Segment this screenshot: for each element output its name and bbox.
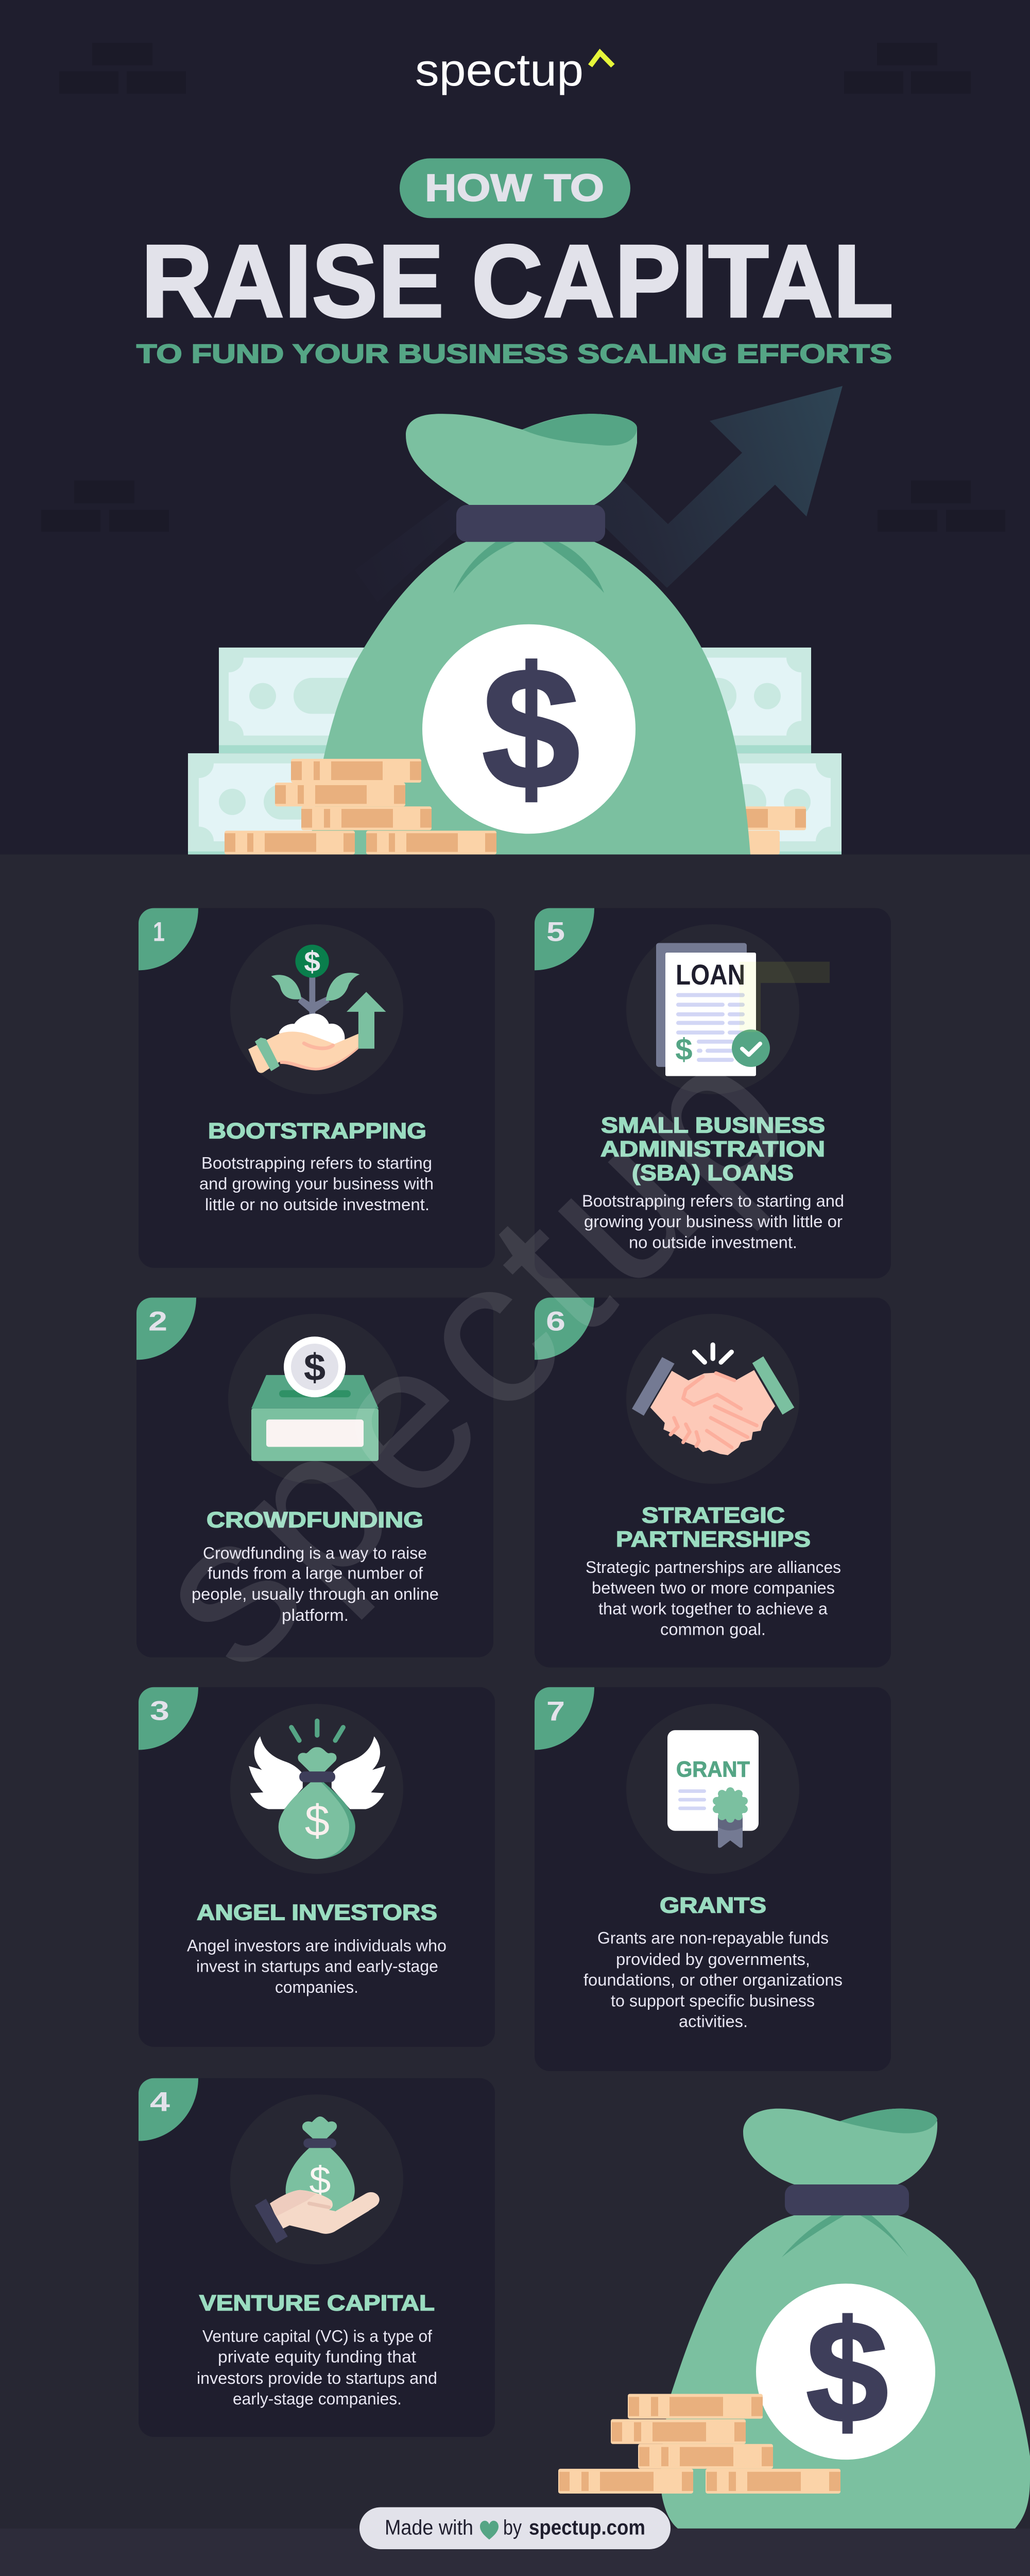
lower background bbox=[0, 854, 1030, 2529]
description bbox=[583, 1928, 843, 2031]
badge: 7: 7 bbox=[546, 1697, 565, 1726]
icon: donation box bbox=[228, 1314, 401, 1484]
badge: 5: 5 bbox=[546, 917, 565, 947]
panel: 5 SBA loans bbox=[535, 908, 891, 1278]
description: invest in startups and early-stage bbox=[196, 1957, 438, 1976]
description: people, usually through an online bbox=[192, 1584, 439, 1603]
bottom coin stack bbox=[558, 2394, 840, 2494]
badge: 4 bbox=[139, 2078, 198, 2141]
badge: 1 bbox=[139, 908, 198, 970]
heading: CROWDFUNDING bbox=[207, 1508, 423, 1532]
icon: winged money bag bbox=[230, 1704, 403, 1874]
icon: grant certificate bbox=[626, 1704, 799, 1874]
how to pill bbox=[400, 158, 630, 218]
icon: donation box: $ bbox=[304, 1346, 325, 1389]
badge: 1: 1 bbox=[153, 917, 165, 947]
description: little or no outside investment. bbox=[205, 1195, 430, 1214]
description: foundations, or other organizations bbox=[583, 1970, 843, 1989]
illustration: cash stacks bbox=[188, 648, 842, 854]
heading bbox=[616, 1503, 811, 1552]
coin stack bbox=[225, 759, 496, 854]
description bbox=[586, 1557, 841, 1639]
illustration: money bag bbox=[310, 414, 750, 854]
description: to support specific business bbox=[611, 1991, 815, 2010]
subtitle: TO FUND YOUR BUSINESS SCALING EFFORTS bbox=[136, 338, 892, 368]
badge: 4: 4 bbox=[150, 2087, 170, 2117]
description: Grants are non-repayable funds bbox=[597, 1928, 829, 1947]
heading bbox=[600, 1113, 825, 1185]
header background bbox=[0, 0, 1030, 854]
badge: 6 bbox=[535, 1298, 594, 1360]
coins behind bag bbox=[650, 806, 806, 854]
icon: hand holding money bag bbox=[230, 2094, 403, 2264]
description: Venture capital (VC) is a type of bbox=[202, 2327, 433, 2345]
description bbox=[197, 2327, 437, 2408]
illustration: bottom money bag bbox=[661, 2109, 1030, 2529]
badge: 2: 2 bbox=[148, 1307, 167, 1336]
icon: hand holding plant: $ bbox=[304, 945, 320, 978]
heading: ANGEL INVESTORS bbox=[197, 1901, 437, 1925]
description: platform. bbox=[282, 1605, 349, 1624]
icon: loan document: $ bbox=[675, 1032, 693, 1066]
badge: 3: 3 bbox=[150, 1696, 169, 1726]
description: funds from a large number of bbox=[208, 1564, 423, 1583]
heading: STRATEGIC bbox=[642, 1503, 785, 1528]
description: early-stage companies. bbox=[233, 2389, 402, 2408]
description bbox=[582, 1191, 844, 1251]
icon: grant certificate: GRANT bbox=[676, 1757, 750, 1782]
icon: winged money bag: $ bbox=[305, 1797, 330, 1845]
panel: 2 crowdfunding bbox=[136, 1298, 493, 1657]
heading: GRANTS bbox=[660, 1893, 766, 1918]
description: provided by governments, bbox=[616, 1950, 810, 1969]
made with badge: Made with bbox=[385, 2515, 473, 2539]
description: Strategic partnerships are alliances bbox=[586, 1557, 841, 1577]
description bbox=[199, 1154, 434, 1214]
made with badge: spectup.com bbox=[529, 2515, 645, 2539]
heading: ADMINISTRATION bbox=[600, 1137, 825, 1162]
description: Bootstrapping refers to starting bbox=[201, 1154, 432, 1172]
panel: 3 angel investors bbox=[139, 1687, 495, 2047]
panel: 6 strategic partnerships bbox=[535, 1298, 891, 1667]
how to pill: HOW TO bbox=[425, 166, 604, 209]
footer strip bbox=[0, 2529, 1030, 2576]
icon: hand holding plant bbox=[230, 924, 403, 1094]
description: growing your business with little or bbox=[584, 1212, 843, 1231]
title: RAISE CAPITAL bbox=[141, 223, 894, 338]
description: companies. bbox=[275, 1977, 358, 1996]
watermark: spectup bbox=[105, 996, 832, 1710]
description: Bootstrapping refers to starting and bbox=[582, 1191, 844, 1210]
panel: 4 venture capital bbox=[139, 2078, 495, 2437]
illustration: money bag: $ bbox=[482, 632, 580, 825]
description bbox=[187, 1936, 447, 1996]
badge: 3 bbox=[139, 1687, 198, 1750]
description: investors provide to startups and bbox=[197, 2368, 437, 2387]
icon: hand holding money bag: $ bbox=[309, 2158, 331, 2201]
description: Crowdfunding is a way to raise bbox=[203, 1544, 427, 1562]
heading: PARTNERSHIPS bbox=[616, 1527, 811, 1552]
badge: 6: 6 bbox=[546, 1307, 565, 1336]
heading: VENTURE CAPITAL bbox=[199, 2291, 435, 2315]
panel: 1 bootstrapping bbox=[139, 908, 495, 1268]
heading: SMALL BUSINESS bbox=[601, 1113, 825, 1138]
panel: 7 grants bbox=[535, 1687, 891, 2071]
description: between two or more companies bbox=[592, 1578, 835, 1597]
heading: (SBA) LOANS bbox=[632, 1161, 794, 1185]
description bbox=[192, 1544, 439, 1624]
badge: 5 bbox=[535, 908, 594, 970]
heading: BOOTSTRAPPING bbox=[208, 1119, 426, 1143]
description: activities. bbox=[679, 2012, 748, 2031]
description: that work together to achieve a bbox=[598, 1599, 828, 1618]
arrow: growth bbox=[355, 386, 843, 602]
icon: handshake bbox=[626, 1314, 799, 1484]
description: Angel investors are individuals who bbox=[187, 1936, 447, 1955]
made with badge bbox=[359, 2507, 671, 2549]
logo: spectup bbox=[415, 44, 583, 95]
description: and growing your business with bbox=[199, 1174, 434, 1193]
description: no outside investment. bbox=[629, 1233, 797, 1251]
badge: 2 bbox=[136, 1298, 196, 1360]
illustration: bottom money bag: $ bbox=[806, 2291, 888, 2453]
description: private equity funding that bbox=[218, 2347, 416, 2366]
description: common goal. bbox=[660, 1620, 766, 1639]
icon: loan document: LOAN bbox=[676, 958, 745, 991]
badge: 7 bbox=[535, 1687, 594, 1750]
icon: loan document bbox=[626, 924, 799, 1094]
made with badge: by bbox=[503, 2515, 522, 2539]
